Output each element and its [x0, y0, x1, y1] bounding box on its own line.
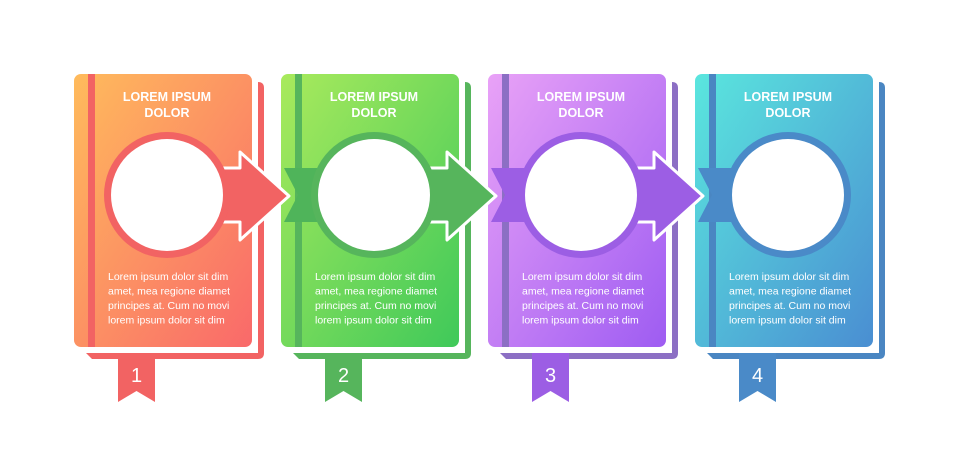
circle 4	[725, 132, 851, 258]
arrow 1	[215, 152, 289, 240]
body text 3: principes at. Cum no movi	[522, 300, 643, 312]
circle 1	[104, 132, 230, 258]
arrow 3	[629, 152, 703, 240]
bookmark 2	[325, 353, 362, 402]
notch tail 3	[491, 168, 529, 222]
body text 4: principes at. Cum no movi	[729, 300, 850, 312]
body text 1: lorem ipsum dolor sit dim	[108, 314, 225, 326]
bookmark 3	[532, 353, 569, 402]
panel: step 2 book: DOLOR	[351, 106, 397, 120]
body text 3: lorem ipsum dolor sit dim	[522, 314, 639, 326]
panel: step 2 book: 2	[338, 365, 349, 387]
panel: step 4 book	[695, 74, 885, 402]
body text 4: Lorem ipsum dolor sit dim	[729, 271, 849, 283]
circle 2	[311, 132, 437, 258]
body text 1: principes at. Cum no movi	[108, 300, 229, 312]
panel: step 3 book: 3	[545, 365, 556, 387]
cover 4	[695, 74, 873, 347]
heading 1: LOREM IPSUM	[123, 90, 211, 104]
panel: step 4 book: DOLOR	[765, 106, 811, 120]
heading 3: LOREM IPSUM	[537, 90, 625, 104]
heading 2: LOREM IPSUM	[330, 90, 418, 104]
bookmark 1	[118, 353, 155, 402]
panel: step 1 book	[74, 74, 264, 402]
arrows between steps	[215, 152, 703, 240]
body text 1: amet, mea regione diamet	[108, 286, 230, 298]
body text 2: amet, mea regione diamet	[315, 286, 437, 298]
arrow 2	[422, 152, 496, 240]
panel: step 4 book: 4	[752, 365, 763, 387]
cover 3	[488, 74, 666, 347]
panel: step 3 book	[488, 74, 678, 402]
body text 2: principes at. Cum no movi	[315, 300, 436, 312]
notch tail 4	[698, 168, 736, 222]
body text 4: amet, mea regione diamet	[729, 286, 851, 298]
body text 3: Lorem ipsum dolor sit dim	[522, 271, 642, 283]
body text 3: amet, mea regione diamet	[522, 286, 644, 298]
back page 3	[494, 82, 678, 359]
circles	[104, 132, 851, 258]
cover 2	[281, 74, 459, 347]
back page 2	[287, 82, 471, 359]
body text 4: lorem ipsum dolor sit dim	[729, 314, 846, 326]
notch tail 2	[284, 168, 322, 222]
body text 2: Lorem ipsum dolor sit dim	[315, 271, 435, 283]
back page 4	[701, 82, 885, 359]
cover 1	[74, 74, 252, 347]
bookmark 4	[739, 353, 776, 402]
back page 1	[80, 82, 264, 359]
panel: step 2 book	[281, 74, 471, 402]
body text 1: Lorem ipsum dolor sit dim	[108, 271, 228, 283]
body text 2: lorem ipsum dolor sit dim	[315, 314, 432, 326]
panel: step 1 book: DOLOR	[144, 106, 190, 120]
circle 3	[518, 132, 644, 258]
panel: step 1 book: 1	[131, 365, 142, 387]
heading 4: LOREM IPSUM	[744, 90, 832, 104]
panel: step 3 book: DOLOR	[558, 106, 604, 120]
